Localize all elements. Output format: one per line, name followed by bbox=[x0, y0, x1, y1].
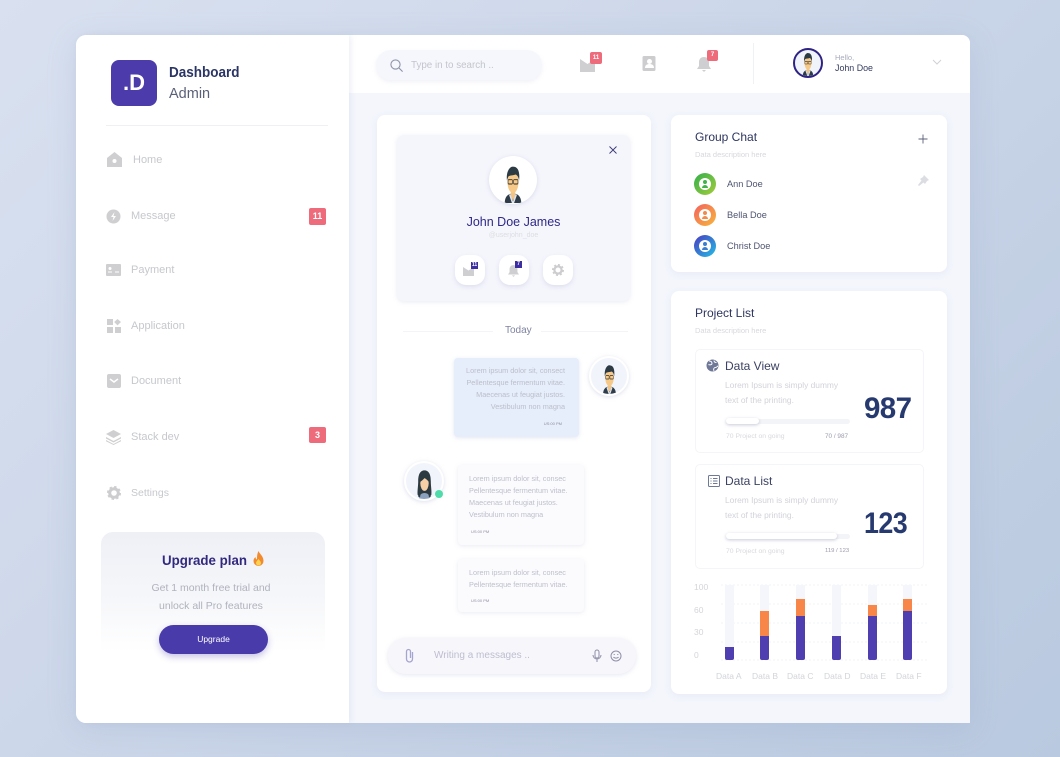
nav: payment bbox=[106, 264, 174, 276]
received message one: Maecenas ut feugiat justos. bbox=[469, 498, 558, 507]
bar: Data B bbox=[760, 585, 769, 660]
stat card: data view bbox=[695, 349, 924, 453]
member: Bella Doe: Bella Doe bbox=[727, 210, 767, 220]
data list text: Lorem Ipsum is simply dummy bbox=[725, 495, 838, 505]
x axis labels: Data F bbox=[896, 671, 922, 681]
profile bell button: 7 bbox=[517, 261, 520, 267]
received message two bbox=[458, 559, 584, 612]
upgrade heading: Upgrade plan bbox=[162, 552, 247, 568]
upgrade description bbox=[151, 582, 271, 612]
nav: document: Document bbox=[131, 375, 181, 387]
sent message: Maecenas ut feugiat justos. bbox=[476, 390, 565, 399]
x axis labels: Data A bbox=[716, 671, 742, 681]
sent message: Pellentesque fermentum vitae. bbox=[466, 378, 565, 387]
sent message: US:00 PM bbox=[544, 421, 562, 426]
nav: stack dev bbox=[106, 427, 326, 445]
user greeting bbox=[835, 53, 873, 73]
y axis labels: 100 bbox=[694, 582, 708, 592]
profile handle: @userjohn_doe bbox=[489, 232, 538, 239]
logo: .D bbox=[123, 70, 145, 95]
bar: Data E bbox=[868, 585, 877, 660]
received message one: US:00 PM bbox=[471, 529, 489, 534]
data view text: Lorem Ipsum is simply dummy bbox=[725, 380, 838, 390]
data list ratio: 119 / 123 bbox=[825, 548, 849, 554]
data list text: text of the printing. bbox=[725, 510, 794, 520]
panel: sidebar bbox=[76, 35, 349, 723]
icon: mail with badge bbox=[580, 52, 602, 72]
x axis labels: Data E bbox=[860, 671, 886, 681]
upgrade button bbox=[159, 625, 268, 654]
sent message bbox=[454, 358, 579, 437]
profile avatar bbox=[489, 156, 537, 204]
nav: home bbox=[107, 152, 162, 167]
data list progress caption: 70 Project on going bbox=[726, 548, 785, 555]
icon: chevron bbox=[932, 60, 942, 64]
message count badge bbox=[309, 208, 326, 225]
brand title bbox=[169, 65, 239, 102]
today label: Today bbox=[505, 325, 532, 336]
profile name: John Doe James bbox=[467, 215, 560, 229]
icon: contact book bbox=[642, 56, 656, 71]
panel: top header bar bbox=[349, 35, 970, 93]
bar chart bbox=[721, 584, 927, 660]
data list number: 123 bbox=[864, 507, 907, 540]
icon: bell with badge: 7 bbox=[711, 52, 714, 58]
nav: payment: Payment bbox=[131, 264, 174, 276]
user avatar bbox=[793, 48, 823, 78]
icon: plus bbox=[918, 134, 928, 144]
stack dev count badge: 3 bbox=[315, 430, 320, 440]
icon: close bbox=[609, 146, 617, 154]
brand title: Admin bbox=[169, 86, 210, 102]
data view number: 987 bbox=[864, 392, 911, 425]
bar: Data C bbox=[796, 585, 805, 660]
panel: group chat bbox=[671, 115, 947, 272]
member: Christ Doe: Christ Doe bbox=[727, 241, 770, 251]
sent message: Vestibulum non magna bbox=[491, 402, 565, 411]
contact avatar bbox=[403, 460, 445, 503]
received message two: Lorem ipsum dolor sit, consec bbox=[469, 568, 566, 577]
icon: bell with badge bbox=[697, 50, 718, 72]
upgrade description: unlock all Pro features bbox=[159, 600, 263, 612]
icon: search bbox=[390, 59, 403, 72]
data view ratio: 70 / 987 bbox=[825, 433, 848, 440]
received message two: Pellentesque fermentum vitae. bbox=[469, 580, 568, 589]
search box bbox=[376, 50, 542, 80]
user greeting: John Doe bbox=[835, 63, 873, 73]
nav: application: Application bbox=[131, 320, 185, 332]
nav: message bbox=[106, 208, 326, 225]
profile mail button bbox=[455, 255, 485, 285]
received message one: Pellentesque fermentum vitae. bbox=[469, 486, 568, 495]
profile card bbox=[397, 135, 630, 301]
icon: paperclip bbox=[406, 648, 414, 663]
member: Christ Doe bbox=[694, 235, 770, 257]
profile settings button bbox=[543, 255, 573, 285]
project list heading: Project List bbox=[695, 306, 754, 320]
member: Ann Doe bbox=[694, 173, 763, 195]
icon: globe bbox=[706, 360, 718, 372]
bar: Data D bbox=[832, 585, 841, 660]
profile mail button: 11 bbox=[472, 262, 477, 268]
nav: application bbox=[107, 319, 185, 333]
dashboard window bbox=[76, 35, 970, 723]
panel: upgrade plan bbox=[101, 532, 325, 658]
brand title: Dashboard bbox=[169, 65, 239, 81]
panel: project list bbox=[671, 291, 947, 694]
panel: chat bbox=[377, 115, 651, 692]
user greeting: Hello, bbox=[835, 53, 854, 62]
data view title: Data View bbox=[725, 359, 779, 373]
x axis labels: Data B bbox=[752, 671, 778, 681]
stat card: data list bbox=[695, 464, 924, 569]
x axis labels bbox=[716, 671, 922, 681]
sent message: Lorem ipsum dolor sit, consect bbox=[466, 366, 565, 375]
sender avatar bbox=[589, 356, 629, 396]
nav: stack dev: Stack dev bbox=[131, 431, 179, 443]
bar: Data F bbox=[903, 585, 912, 660]
message input bbox=[388, 638, 636, 674]
data list text bbox=[725, 495, 838, 520]
nav: settings: Settings bbox=[131, 487, 169, 499]
group chat heading: Group Chat bbox=[695, 130, 757, 144]
member: Bella Doe bbox=[694, 204, 767, 226]
logo bbox=[111, 60, 157, 106]
icon: list bbox=[708, 475, 720, 487]
profile bell button bbox=[499, 255, 529, 285]
icon: emoji bbox=[610, 650, 622, 662]
y axis labels: 30 bbox=[694, 627, 703, 637]
data list progress bbox=[726, 534, 850, 539]
project list description: Data description here bbox=[695, 326, 766, 335]
y axis labels: 60 bbox=[694, 605, 703, 615]
nav: message: Message bbox=[131, 210, 176, 222]
input placeholder: Writing a messages .. bbox=[434, 650, 530, 661]
online indicator bbox=[435, 490, 443, 498]
data view progress caption: 70 Project on going bbox=[726, 433, 785, 440]
nav: document bbox=[107, 374, 182, 388]
nav: home: Home bbox=[133, 154, 162, 166]
member: Ann Doe: Ann Doe bbox=[727, 179, 763, 189]
icon: flame bbox=[254, 551, 264, 566]
group chat description: Data description here bbox=[695, 150, 766, 159]
bar: Data A bbox=[725, 585, 734, 660]
data list title: Data List bbox=[725, 474, 772, 488]
y axis labels: 0 bbox=[694, 650, 699, 660]
message count badge: 11 bbox=[313, 211, 322, 221]
header divider bbox=[753, 43, 754, 84]
data view progress bbox=[726, 419, 850, 424]
stack dev count badge bbox=[309, 427, 326, 443]
received message one: Lorem ipsum dolor sit, consec bbox=[469, 474, 566, 483]
upgrade description: Get 1 month free trial and bbox=[151, 582, 271, 594]
y axis labels bbox=[694, 582, 708, 660]
search placeholder: Type in to search .. bbox=[411, 60, 494, 71]
received message one: Vestibulum non magna bbox=[469, 510, 543, 519]
received message two: US:00 PM bbox=[471, 598, 489, 603]
received message one bbox=[458, 465, 584, 545]
x axis labels: Data D bbox=[824, 671, 850, 681]
data view text bbox=[725, 380, 838, 404]
icon: pin bbox=[918, 175, 929, 186]
nav: settings bbox=[107, 486, 169, 500]
data view text: text of the printing. bbox=[725, 394, 794, 404]
icon: mail with badge: 11 bbox=[593, 55, 599, 61]
icon: microphone bbox=[592, 650, 602, 662]
upgrade button: Upgrade bbox=[197, 634, 230, 644]
x axis labels: Data C bbox=[787, 671, 813, 681]
